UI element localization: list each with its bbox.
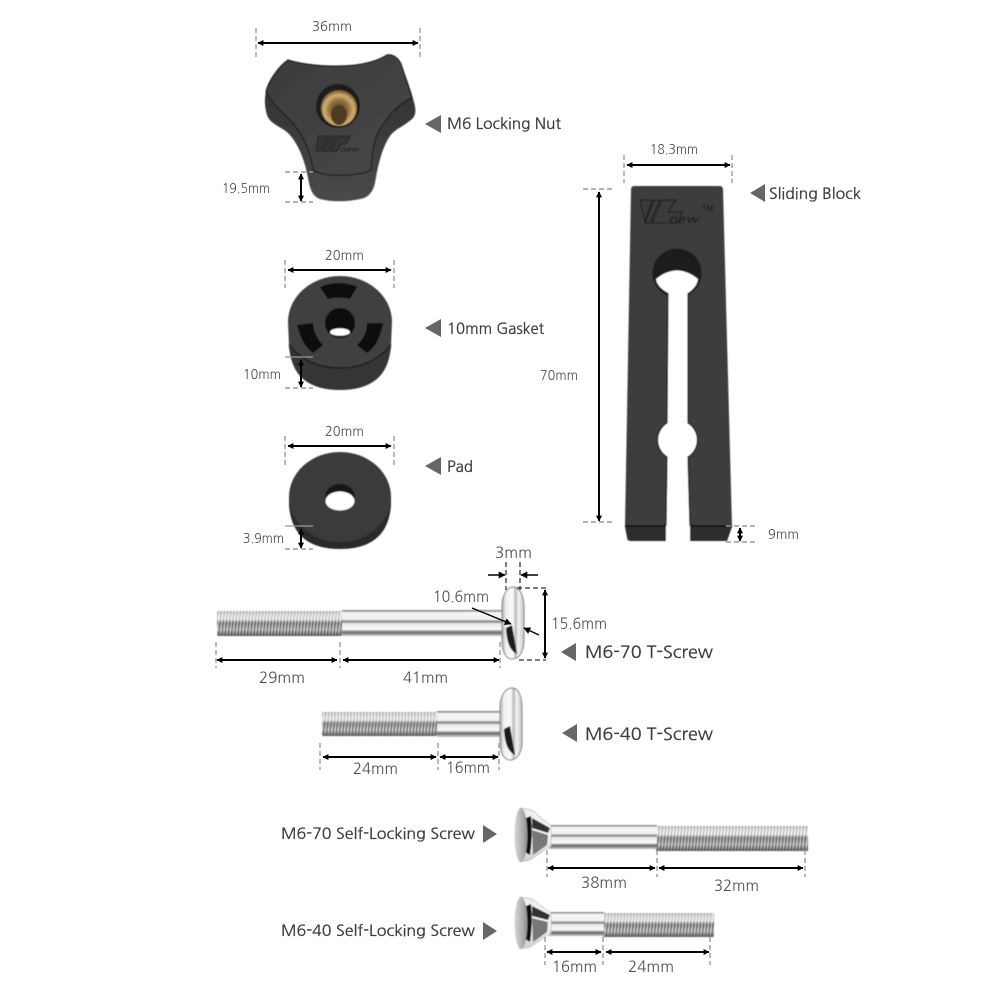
dimension: 16mm shank — [438, 743, 499, 776]
label: M6-40 T-Screw: M6-40 T-Screw — [585, 726, 714, 743]
thickness dimension: 9mm — [726, 526, 799, 542]
icon: locking nut photo: new — [340, 146, 360, 154]
dimension: 16mm shank — [545, 937, 603, 975]
width dimension: 20mm: 20mm — [325, 248, 364, 262]
panel: pad — [243, 424, 473, 549]
width dimension: 18.3mm: 18.3mm — [650, 142, 698, 156]
label: M6-70 T-Screw: M6-70 T-Screw — [585, 644, 714, 661]
dimension: 24mm thread: 24mm — [628, 960, 674, 975]
width dimension: 20mm — [285, 424, 394, 465]
dimension: 3mm head thickness — [488, 546, 538, 590]
length dimension: 70mm — [540, 189, 613, 522]
label: M6-70 Self-Locking Screw: M6-70 Self-Locking Screw — [281, 826, 475, 842]
icon: locking nut photo — [265, 55, 415, 201]
dimension: 16mm shank: 16mm — [446, 761, 490, 776]
icon: M6-70 T-screw photo — [217, 587, 524, 659]
dimension: 24mm thread: 24mm — [353, 762, 398, 777]
width dimension: 20mm — [285, 248, 394, 288]
label: M6 Locking Nut: M6 Locking Nut — [447, 116, 561, 132]
label: Pad: Pad — [447, 459, 473, 475]
dimension: 38mm shank — [547, 850, 657, 891]
dimension: 32mm thread: 32mm — [714, 879, 759, 894]
width dimension: 20mm: 20mm — [325, 424, 364, 438]
panel: M6 locking nut — [222, 19, 561, 202]
dimension: 10.6mm head width — [433, 590, 539, 635]
width dimension: 18.3mm — [624, 142, 732, 183]
width dimension: 36mm — [256, 19, 420, 57]
dimension: 41mm shank — [340, 642, 500, 686]
icon: M6-40 T-screw photo — [322, 688, 522, 760]
icon: pad photo — [289, 452, 391, 549]
dimension: 3mm head thickness: 3mm — [495, 546, 532, 561]
icon: sliding block photo: new — [668, 214, 700, 225]
icon: M6-40 self-locking screw photo — [514, 897, 714, 949]
label: Pad — [425, 457, 473, 475]
dimension: 15.6mm head height: 15.6mm — [551, 617, 607, 632]
thickness dimension: 3.9mm — [243, 526, 313, 549]
dimension: 15.6mm head height — [517, 588, 607, 660]
length dimension: 70mm: 70mm — [540, 368, 578, 382]
height dimension: 10mm: 10mm — [243, 367, 281, 381]
label: M6 Locking Nut — [425, 115, 561, 133]
label: 10mm Gasket: 10mm Gasket — [447, 321, 544, 337]
label: Sliding Block: Sliding Block — [769, 186, 861, 202]
thickness dimension: 3.9mm: 3.9mm — [243, 531, 284, 545]
dimension: 24mm thread — [320, 743, 436, 777]
icon: sliding block photo — [625, 186, 732, 545]
dimension: 16mm shank: 16mm — [552, 960, 597, 975]
icon: M6-70 self-locking screw photo — [514, 808, 808, 862]
thickness dimension: 9mm: 9mm — [768, 527, 799, 541]
dimension: 38mm shank: 38mm — [581, 876, 627, 891]
dimension: 29mm thread — [216, 642, 337, 686]
label: 10mm Gasket — [425, 319, 544, 337]
height dimension: 10mm — [243, 357, 313, 388]
icon: sliding block photo: TM — [702, 206, 713, 213]
panel: M6-40 self-locking screw — [281, 897, 714, 975]
panel: M6-40 T-screw — [320, 688, 714, 777]
label: M6-40 Self-Locking Screw: M6-40 Self-Locking Screw — [281, 923, 475, 939]
panel: M6-70 self-locking screw — [281, 808, 808, 894]
dimension: 24mm thread — [606, 937, 710, 975]
panel: M6-70 T-screw — [216, 546, 714, 686]
dimension: 29mm thread: 29mm — [259, 671, 305, 686]
panel: 10mm gasket — [243, 248, 544, 390]
width dimension: 36mm: 36mm — [312, 19, 352, 33]
icon: gasket photo — [288, 276, 392, 390]
height dimension: 19.5mm: 19.5mm — [222, 181, 270, 195]
height dimension: 19.5mm — [222, 172, 313, 202]
panel: sliding block — [540, 142, 861, 545]
dimension: 10.6mm head width: 10.6mm — [433, 590, 489, 605]
label: Sliding Block — [750, 184, 861, 202]
dimension: 41mm shank: 41mm — [403, 671, 448, 686]
